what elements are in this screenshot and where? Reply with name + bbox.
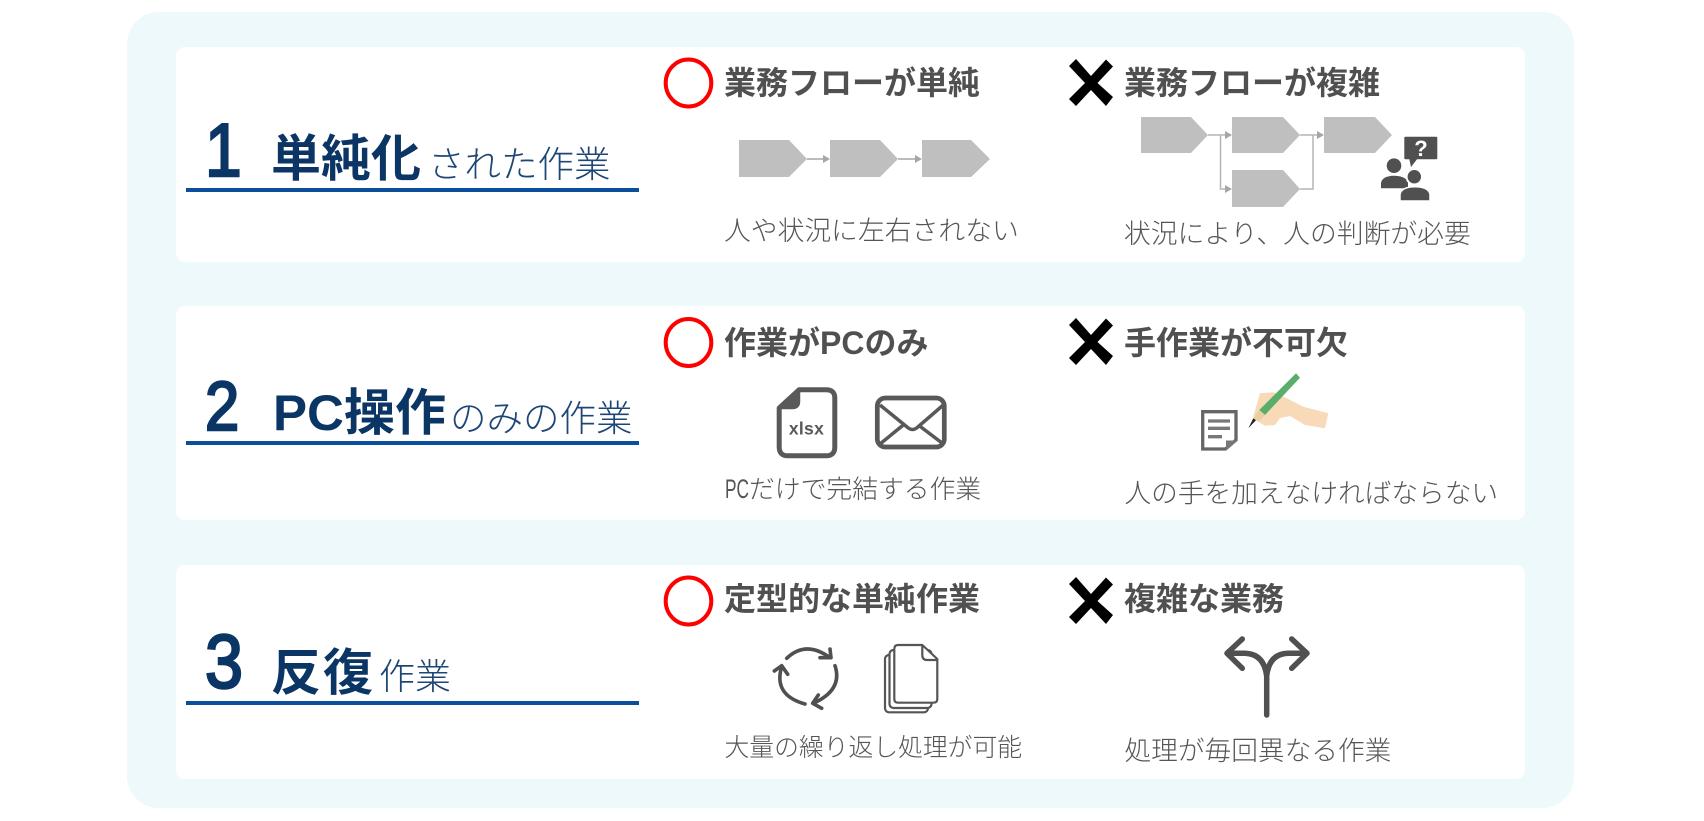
icon: people with question: ? — [1414, 136, 1428, 161]
heading: routine work: 定型的な単純作業 — [724, 581, 980, 617]
icon: stacked documents — [885, 645, 937, 712]
icon: envelope — [877, 398, 944, 447]
icon: xlsx file — [779, 390, 835, 456]
diagram: branching flow — [1141, 117, 1392, 207]
heading: manual work: 手作業が不可欠 — [1124, 325, 1348, 361]
text: complex flow note: 状況により、人の判断が必要 — [1124, 219, 1471, 249]
icon: document and writing hand — [1203, 373, 1328, 451]
text: complex note: 処理が毎回異なる作業 — [1124, 736, 1391, 766]
diagram: simple flow — [739, 140, 990, 177]
heading: row 1: された作業 — [428, 144, 610, 185]
heading: row 1 — [186, 108, 639, 192]
heading: complex flow: 業務フローが複雑 — [1124, 65, 1380, 101]
heading: row 3: 反復 — [271, 645, 375, 701]
heading: row 2 — [186, 366, 639, 445]
text: repetition note: 大量の繰り返し処理が可能 — [724, 734, 1022, 762]
text: simple flow note: 人や状況に左右されない — [724, 216, 1019, 246]
panel: row 1 simplified work — [176, 47, 1525, 262]
panel: row 2 PC only work — [176, 306, 1525, 520]
icon: forked arrow — [1227, 639, 1307, 715]
heading: simple flow: 業務フローが単純 — [724, 65, 980, 101]
text: manual note: 人の手を加えなければならない — [1124, 478, 1498, 508]
heading: row 3: 3 — [205, 621, 243, 705]
icon: black cross — [1069, 577, 1113, 624]
panel: row 3 repetitive work — [176, 565, 1525, 779]
icon: red circle — [666, 60, 711, 106]
heading: row 1: 1 — [205, 108, 242, 192]
heading: row 2: のみの作業 — [450, 398, 632, 439]
icon: black cross — [1069, 318, 1113, 365]
heading: row 2: 2 — [205, 366, 239, 445]
icon: black cross — [1069, 59, 1113, 106]
icon: red circle — [666, 319, 711, 366]
heading: complex work: 複雑な業務 — [1124, 581, 1284, 617]
icon: people with question — [1381, 136, 1437, 201]
icon: cycle arrows — [774, 649, 837, 708]
text: PC note: PC — [725, 474, 749, 504]
heading: row 2: PC操作 — [273, 385, 446, 441]
heading: row 3: 作業 — [379, 656, 451, 697]
heading: row 1: 単純化 — [271, 131, 421, 187]
heading: row 3 — [186, 621, 639, 705]
text: PC note: だけで完結する作業 — [749, 475, 981, 504]
heading: PC only: 作業がPCのみ — [724, 325, 928, 361]
icon: xlsx file: xlsx — [789, 418, 824, 438]
icon: red circle — [666, 578, 711, 624]
